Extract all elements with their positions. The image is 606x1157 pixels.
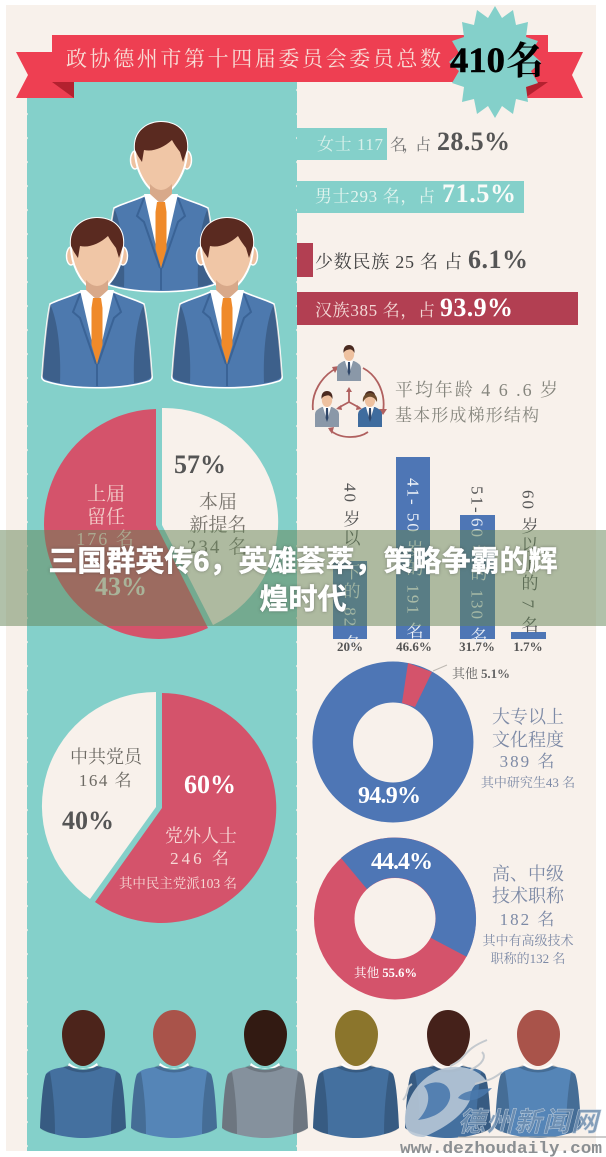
label: non-party: 246 名	[170, 849, 232, 868]
average age text	[395, 379, 558, 425]
text: education: 文化程度	[492, 730, 564, 750]
average age text: 基本形成梯形结构	[395, 406, 539, 425]
bar chart: age: 60 岁以上的 7 名	[518, 490, 538, 635]
label: incumbents: 43%	[95, 572, 147, 601]
label: non-party: 党外人士	[165, 826, 237, 846]
donut: titles	[334, 838, 476, 980]
bar chart: age: 51-	[468, 486, 486, 515]
label: new nominees: 234 名	[187, 536, 249, 558]
title text: 政协德州市第十四届委员会委员总数	[66, 47, 441, 71]
total number	[450, 40, 544, 83]
label: CPC members	[62, 747, 144, 835]
donut: education: 其他 5.1%	[452, 666, 510, 681]
donut: education	[312, 662, 510, 822]
bar: Han: 93.9%	[440, 293, 513, 322]
bar chart: age: 1.7%	[513, 639, 543, 654]
label: CPC members: 164 名	[79, 771, 133, 790]
average age text: 平均年龄 4 6 .6 岁	[395, 379, 558, 400]
watermark: 德州新闻网	[458, 1107, 602, 1137]
donut: titles: 44.4%	[371, 849, 433, 875]
label: non-party: 其中民主党派103 名	[119, 875, 237, 891]
bar chart: age: 46.6%	[396, 639, 432, 654]
text: education: 大专以上	[492, 707, 564, 727]
total number: 410	[450, 40, 505, 80]
label: incumbents: 留任	[87, 506, 125, 528]
watermark	[400, 1040, 606, 1157]
label: CPC members: 中共党员	[70, 747, 144, 767]
bar: women: 名，占	[390, 136, 431, 154]
bar: men	[297, 179, 524, 213]
label: incumbents: 上届	[87, 483, 125, 505]
bar chart: age: 40 岁以	[340, 483, 360, 548]
bar: Han: 汉族385 名，占	[315, 301, 435, 320]
icon: age cycle	[313, 345, 387, 437]
text: titles: 高、中级	[492, 864, 564, 884]
text: education: 其中研究生43 名	[481, 775, 575, 790]
bar chart: age: 41- 50 岁的 191 名	[404, 478, 423, 641]
label: new nominees: 57%	[174, 450, 226, 479]
bar: minority: 少数民族 25 名 占	[315, 252, 462, 272]
label: incumbents: 176 名	[76, 529, 136, 549]
bar: men: 71.5%	[442, 179, 516, 208]
bar: Han	[297, 292, 578, 325]
donut: titles: 其他 55.6%	[354, 965, 417, 980]
text: education: 389 名	[500, 752, 556, 771]
label: new nominees: 本届	[199, 491, 237, 513]
illustration: three delegates	[42, 122, 282, 388]
donut: education: 94.9%	[358, 783, 421, 809]
total number: 名	[506, 41, 544, 83]
text: education	[481, 707, 575, 790]
label: new nominees: 新提名	[189, 514, 247, 536]
headline: 三国群英传6，英雄荟萃，策略争霸的辉煌时代	[48, 546, 558, 616]
text: titles: 技术职称	[492, 886, 565, 906]
bar: women: 28.5%	[437, 127, 510, 156]
teal column	[26, 80, 298, 1151]
pie: party membership	[42, 692, 276, 923]
title ribbon	[16, 35, 583, 98]
text: titles: 其中有高级技术	[482, 933, 574, 948]
bar: women	[297, 127, 510, 160]
text: titles: 职称的132 名	[491, 951, 565, 966]
label: CPC members: 40%	[62, 806, 114, 835]
bar: women: 女士 117	[317, 135, 384, 154]
label: non-party: 60%	[184, 770, 236, 799]
label: new nominees	[174, 450, 249, 558]
bar: men: 男士293 名，占	[315, 187, 435, 206]
headline overlay band	[0, 530, 606, 626]
leader line	[433, 665, 447, 671]
label: non-party	[119, 770, 237, 891]
starburst total	[449, 6, 544, 118]
text: titles: 182 名	[500, 910, 556, 929]
bar chart: age	[333, 457, 546, 654]
bar chart: age: 31.7%	[459, 639, 495, 654]
bar chart: age: 60 岁的 130 名	[468, 518, 487, 646]
bar: minority: 6.1%	[468, 245, 528, 274]
label: incumbents	[76, 483, 147, 601]
bar: minority	[297, 243, 528, 277]
bar chart: age: 20%	[337, 639, 363, 654]
illustration: row of people	[40, 1010, 581, 1138]
pie: incumbents vs new	[44, 408, 278, 639]
text: titles	[482, 864, 574, 966]
bar chart: age: 下的 82 名	[340, 563, 360, 654]
